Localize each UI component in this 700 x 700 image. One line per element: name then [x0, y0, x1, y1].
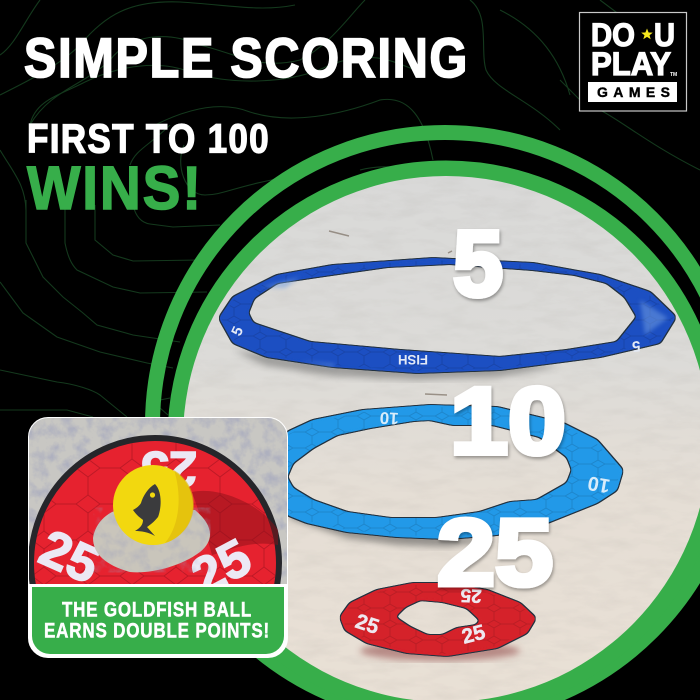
score number: 10: 10: [450, 368, 566, 474]
ring shadow: red: [360, 641, 520, 661]
disc label: 25 top: 25: [141, 441, 197, 497]
ring label: 25 top: 25: [460, 584, 482, 606]
score number: 5: 5: [453, 212, 503, 316]
beach photo with target rings: [170, 170, 700, 700]
logo frame: [580, 12, 686, 111]
inner green ring: [176, 169, 700, 700]
ring label: 10 right: 10: [586, 471, 612, 497]
target ring: 10 points: [270, 405, 623, 539]
sand mound: [93, 508, 210, 572]
ring label: 5 right: 5: [631, 337, 641, 355]
sand debris marks: [329, 231, 452, 395]
logo text: DO: DO: [591, 17, 635, 53]
red target disc: [29, 435, 282, 584]
inset photo: [29, 418, 287, 584]
disc label: 25 right: 25: [182, 528, 261, 607]
disc label: 25 left: 25: [31, 519, 108, 595]
outer green ring: [152, 132, 700, 700]
subheading: first to 100: FIRST TO 100: [27, 116, 270, 162]
shadow on disc: [192, 491, 278, 555]
topographic background lines: [0, 0, 700, 417]
logo star: [641, 28, 653, 39]
ring label: 25 left: 25: [352, 610, 382, 639]
fish eye: [150, 492, 155, 498]
logo text: U: U: [654, 17, 675, 53]
goldfish ball inset panel: [28, 417, 288, 658]
logo trademark: TM: [670, 72, 677, 78]
title: SIMPLE SCORING: [24, 26, 469, 89]
caption box: [32, 587, 284, 654]
inset frame: [29, 418, 287, 657]
subheading: wins: WINS!: [27, 154, 203, 222]
target ring: 25 points: [340, 583, 536, 656]
ring shadow: blue: [233, 350, 560, 380]
ring shadow: light blue: [288, 517, 472, 551]
ring label: 5 left: 5: [228, 324, 247, 339]
ring label: 25 right: 25: [459, 620, 488, 649]
logo: [580, 12, 686, 111]
ring label: 10 top: 10: [379, 408, 399, 428]
worn patches on blue ring: [262, 277, 668, 367]
logo games bar: [588, 82, 677, 102]
caption line 2: EARNS DOUBLE POINTS!: [44, 618, 270, 642]
goldfish ball: [113, 465, 193, 545]
ring label: fish: FISH: [398, 352, 428, 368]
fish icon: [133, 484, 161, 536]
logo text: GAMES: GAMES: [597, 84, 670, 100]
logo text: PLAY: PLAY: [591, 46, 671, 82]
target ring: 5 points: [219, 258, 676, 373]
score number: 25: 25: [437, 500, 553, 606]
caption line 1: THE GOLDFISH BALL: [62, 598, 252, 622]
